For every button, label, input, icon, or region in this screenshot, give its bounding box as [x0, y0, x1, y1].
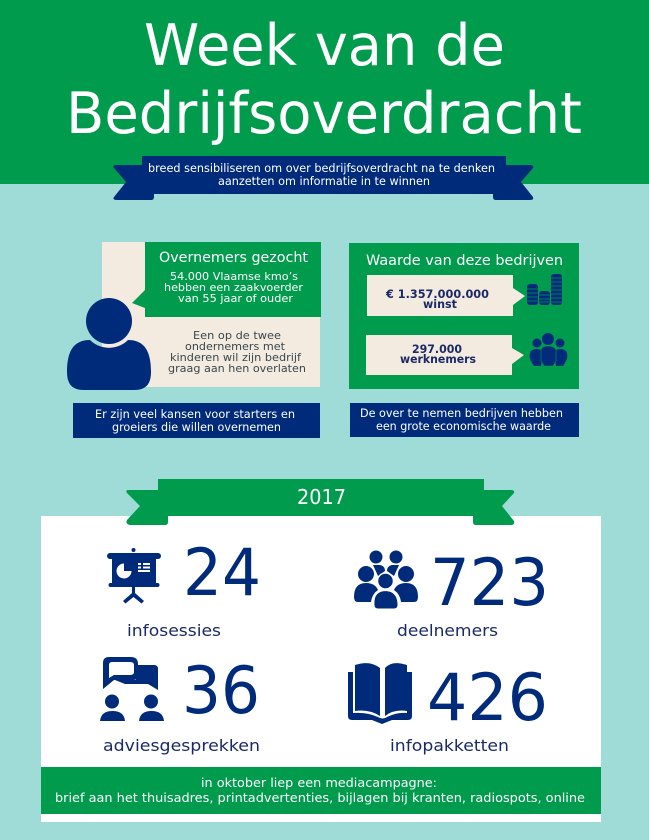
callout: economische waarde: De over te nemen bedrijven hebben	[360, 406, 563, 420]
callout: kansen: Er zijn veel kansen voor starters en	[95, 407, 295, 421]
icon: person	[67, 298, 151, 390]
panel: overnemers gezocht	[67, 242, 321, 390]
value: werknemers	[366, 335, 524, 375]
ribbon: 2017: 2017	[297, 485, 346, 509]
stat: adviesgesprekken: adviesgesprekken	[103, 736, 260, 755]
header band	[0, 0, 649, 184]
stat: adviesgesprekken	[100, 654, 260, 755]
panel: waarde van deze bedrijven	[349, 243, 579, 389]
value: werknemers: 297.000	[412, 342, 462, 356]
text: een op de twee: ondernemers met	[185, 340, 286, 353]
icon: employees	[530, 333, 567, 366]
callout: economische waarde	[350, 403, 579, 437]
stat: deelnemers	[354, 546, 549, 640]
title: Bedrijfsoverdracht	[66, 81, 582, 147]
text: een op de twee: kinderen wil zijn bedrijf	[170, 351, 302, 364]
banner: mediacampagne	[41, 767, 601, 814]
callout: kansen: groeiers die willen overnemen	[112, 420, 281, 434]
banner: mediacampagne: in oktober liep een mediacampagne:	[201, 776, 437, 790]
panel: 2017 results	[41, 479, 601, 822]
stat: infopakketten	[348, 661, 548, 755]
icon: open book	[348, 663, 412, 724]
title	[66, 13, 582, 147]
icon: advice conversation	[100, 657, 164, 721]
subtitle ribbon: aanzetten om informatie in te winnen	[218, 174, 430, 188]
icon: presentation board	[107, 548, 161, 604]
subtitle ribbon	[113, 156, 533, 200]
speech bubble	[132, 242, 321, 317]
stat: deelnemers: deelnemers	[397, 621, 498, 640]
text: een op de twee	[168, 329, 306, 375]
value: winst: winst	[423, 297, 457, 311]
text: een op de twee: graag aan hen overlaten	[168, 362, 306, 375]
speech bubble: 54.000 Vlaamse kmo’s	[170, 270, 298, 283]
value: winst: € 1.357.000.000	[385, 287, 489, 301]
stat: infosessies	[107, 536, 261, 640]
stat: deelnemers: 723	[430, 546, 549, 621]
stat: infosessies: 24	[183, 536, 261, 611]
callout: economische waarde: een grote economische waarde	[376, 419, 551, 433]
stat: infopakketten: 426	[427, 661, 548, 736]
speech bubble: hebben een zaakvoerder	[164, 281, 303, 294]
subtitle ribbon: breed sensibiliseren om over bedrijfsoverdracht na te denken	[148, 161, 495, 175]
panel: waarde van deze bedrijven: Waarde van deze bedrijven	[366, 253, 563, 269]
speech bubble: Overnemers gezocht	[159, 250, 309, 266]
banner: mediacampagne: brief aan het thuisadres, printadvertenties, bijlagen bij kranten, radiospots, online	[55, 791, 585, 805]
text: een op de twee: Een op de twee	[193, 329, 281, 342]
value: winst	[367, 275, 525, 316]
title: Week van de	[144, 13, 505, 79]
callout: kansen	[73, 403, 320, 438]
stat: adviesgesprekken: 36	[182, 654, 260, 729]
speech bubble: van 55 jaar of ouder	[178, 292, 293, 305]
icon: group of people	[354, 550, 418, 609]
stat: infopakketten: infopakketten	[390, 736, 509, 755]
value: werknemers: werknemers	[400, 352, 476, 366]
stat: infosessies: infosessies	[127, 621, 221, 640]
icon: coins	[527, 274, 562, 305]
ribbon: 2017	[126, 479, 514, 525]
